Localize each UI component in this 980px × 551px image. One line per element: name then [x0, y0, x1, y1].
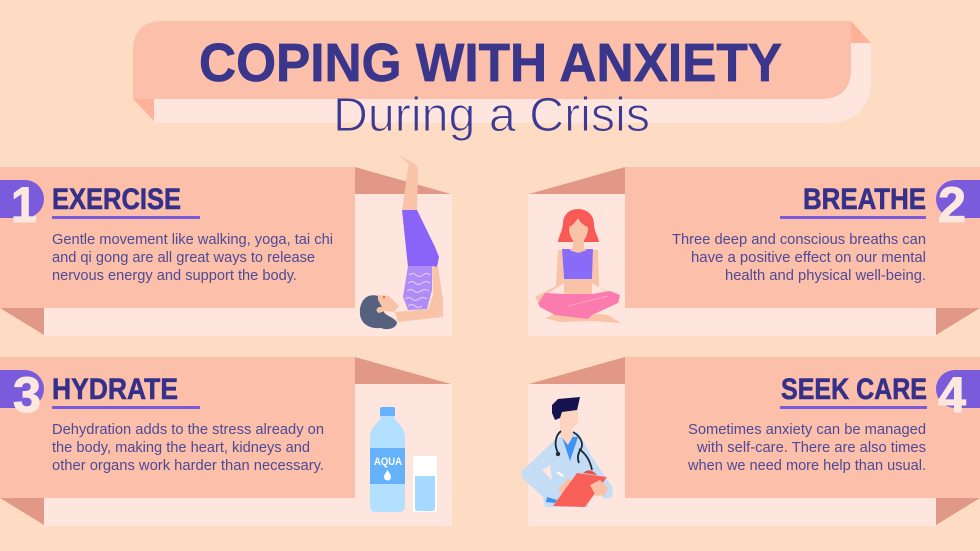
number tab 2: [936, 180, 980, 218]
body text: hydrate: the body, making the heart, kidneys and: [52, 439, 310, 456]
subtitle: During a Crisis: [333, 89, 650, 142]
panel: breathe: [528, 167, 980, 336]
body text: exercise: nervous energy and support the body.: [52, 267, 297, 284]
number 2: 2: [938, 177, 966, 233]
body text: seek care: Sometimes anxiety can be managed: [688, 421, 926, 438]
number tab 4: [936, 370, 980, 408]
illustration: water bottle and glass: [370, 407, 437, 512]
illustration: water bottle and glass: AQUA: [374, 456, 402, 468]
body text: breathe: health and physical well-being.: [725, 267, 926, 284]
number 4: 4: [938, 367, 966, 423]
heading: breathe: BREATHE: [803, 183, 926, 216]
number tab 1: [0, 180, 44, 218]
number 3: 3: [13, 367, 41, 423]
body text: breathe: Three deep and conscious breaths can: [672, 231, 926, 248]
panel: seek care: [528, 357, 980, 526]
title: COPING WITH ANXIETY: [199, 33, 782, 93]
body text: breathe: have a positive effect on our mental: [691, 249, 926, 266]
number 1: 1: [11, 177, 37, 233]
illustration: meditating woman: [535, 209, 621, 323]
panel: hydrate: [0, 357, 452, 526]
illustration: doctor: [521, 397, 613, 507]
body text: exercise: Gentle movement like walking, yoga, tai chi: [52, 231, 333, 248]
heading: exercise: EXERCISE: [52, 183, 181, 216]
heading: seek care: SEEK CARE: [781, 373, 927, 406]
heading: hydrate: HYDRATE: [52, 373, 178, 406]
illustration: yoga shoulder stand: [360, 155, 443, 329]
body text: hydrate: other organs work harder than necessary.: [52, 457, 324, 474]
title banner: [133, 21, 871, 123]
panel: exercise: [0, 167, 452, 336]
body text: hydrate: Dehydration adds to the stress already on: [52, 421, 324, 438]
number tab 3: [0, 370, 44, 408]
body text: exercise: and qi gong are all great ways to release: [52, 249, 315, 266]
body text: seek care: with self-care. There are also times: [696, 439, 926, 456]
body text: seek care: when we need more help than usual.: [687, 457, 926, 474]
